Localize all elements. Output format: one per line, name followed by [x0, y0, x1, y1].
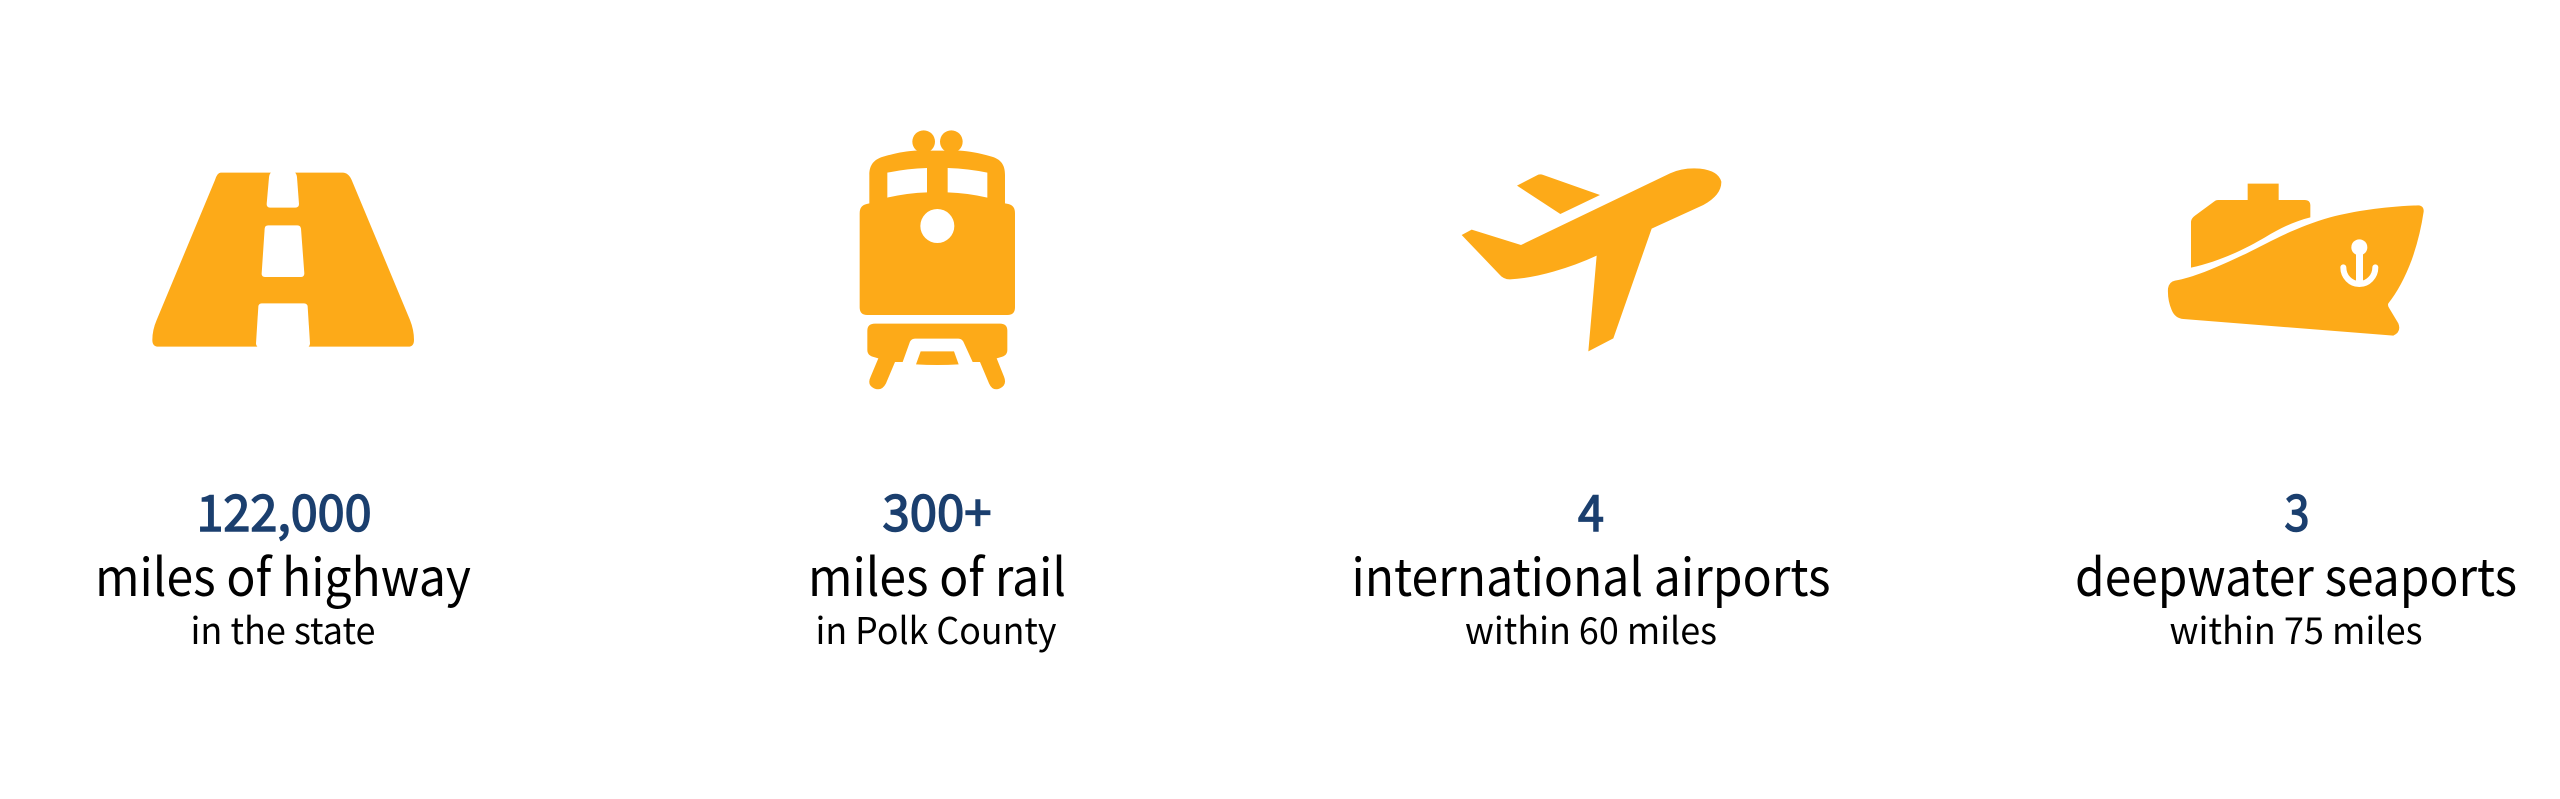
number: 300+: 300+ [882, 474, 992, 546]
icon: locomotive [860, 130, 1015, 389]
label: miles of rail: miles of rail [808, 536, 1066, 611]
number: 4: 4 [1578, 474, 1604, 546]
label: miles of highway: miles of highway [95, 536, 471, 611]
number: 122,000: 122,000 [196, 474, 372, 546]
note: within 75 miles: within 75 miles [2170, 601, 2422, 655]
icon: airplane [1462, 168, 1721, 351]
note: in Polk County: in Polk County [816, 601, 1056, 655]
icon: highway [152, 172, 414, 347]
icon: ship [2168, 184, 2424, 336]
label: international airports: international airports [1352, 536, 1830, 611]
stat: rail [808, 474, 1066, 655]
stat: airports [1352, 474, 1830, 655]
stat: highway [95, 474, 471, 655]
note: in the state: in the state [190, 601, 376, 655]
stat: seaports [2075, 474, 2517, 655]
number: 3: 3 [2284, 474, 2310, 546]
label: deepwater seaports: deepwater seaports [2075, 536, 2517, 611]
note: within 60 miles: within 60 miles [1465, 601, 1717, 655]
